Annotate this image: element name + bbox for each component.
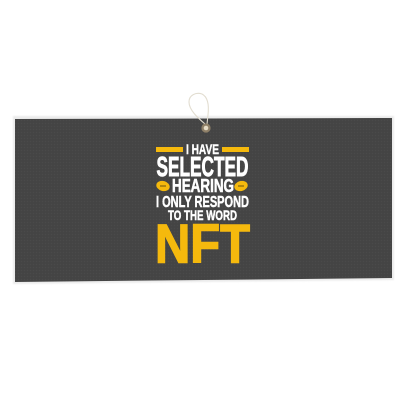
- right bar: [222, 147, 249, 152]
- line: I HAVE: I HAVE: [186, 141, 219, 157]
- towel body: [15, 118, 392, 282]
- grommet: [201, 123, 211, 133]
- slogan text block: [155, 141, 250, 274]
- line: I ONLY RESPOND: I ONLY RESPOND: [156, 194, 249, 211]
- icon: right football: [233, 179, 249, 193]
- towel edge shadow: [13, 116, 394, 284]
- line: HEARING: HEARING: [172, 176, 234, 196]
- line: TO THE WORD: TO THE WORD: [168, 207, 237, 223]
- line: NFT: NFT: [155, 212, 250, 274]
- line: SELECTED: SELECTED: [156, 151, 248, 182]
- icon: left football: [155, 179, 171, 193]
- hanging hook string: [189, 93, 208, 124]
- left bar: [156, 147, 183, 152]
